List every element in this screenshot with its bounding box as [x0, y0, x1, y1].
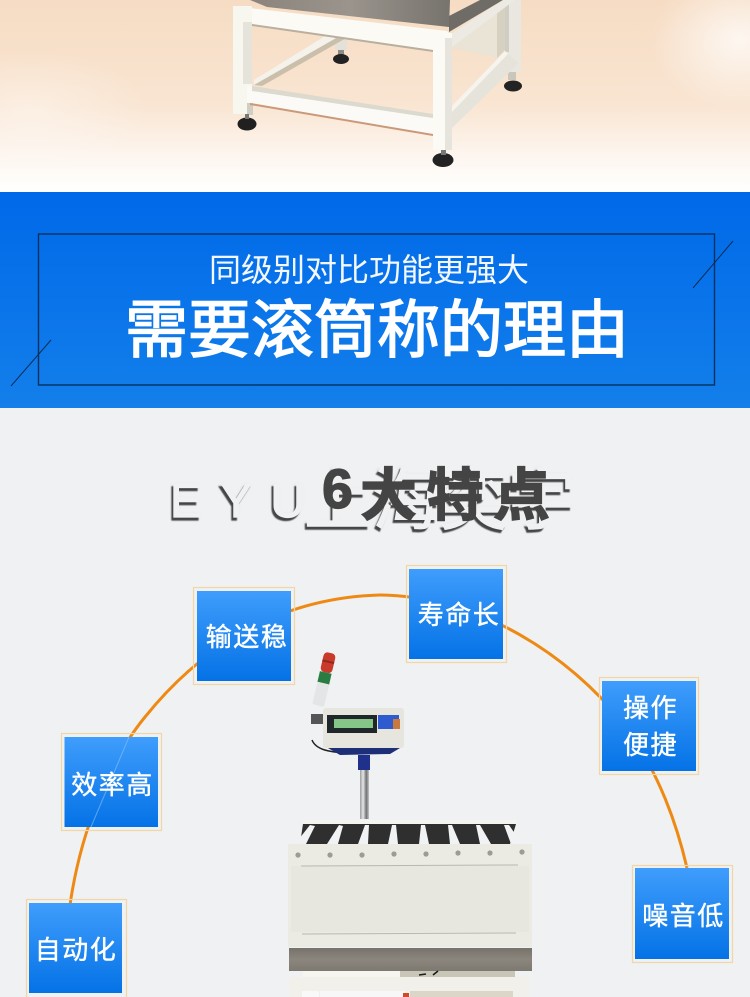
tile: 噪音低: 噪音低: [642, 901, 725, 931]
tile: 寿命长: [406, 566, 506, 662]
watermark: EYU brand: EYU: [169, 476, 304, 529]
heading: six features: 大特点: [360, 464, 550, 528]
icon: pole: [358, 755, 370, 819]
icon: tower light: [312, 652, 336, 707]
tile: 输送稳: [194, 588, 294, 684]
panel: product photo top: [0, 0, 750, 192]
tile: 操作便捷: 操作: [623, 693, 678, 723]
chart line: orange feature arc: [70, 595, 687, 905]
panel: machine base frame: [289, 971, 529, 997]
icon: steel weighing table and white stand: [233, 0, 522, 167]
tile: 自动化: [26, 900, 126, 997]
watermark: EYU brand: [168, 463, 576, 542]
tile: 自动化: 自动化: [35, 935, 117, 965]
panel: blue heading band: [0, 192, 750, 408]
icon: weighing indicator: [323, 708, 404, 755]
panel: features background: [0, 408, 750, 997]
tile: 输送稳: 输送稳: [206, 622, 288, 652]
watermark: EYU brand: 上海奕宇: [302, 466, 574, 542]
tile: 寿命长: 寿命长: [418, 600, 500, 630]
heading: six features: 6: [322, 457, 353, 520]
watermark: EYU brand: EYU: [170, 475, 305, 528]
watermark: EYU brand: 上海奕宇: [304, 463, 576, 539]
tile: 噪音低: [632, 866, 732, 962]
tile: 效率高: [62, 734, 162, 830]
heading: subtitle: 同级别对比功能更强大: [209, 252, 529, 288]
watermark: EYU brand: EYU: [168, 478, 303, 531]
icon: rollers: [295, 820, 522, 844]
watermark: EYU brand: 上海奕宇: [302, 464, 574, 540]
tile: 操作便捷: 便捷: [623, 730, 678, 760]
tile: 操作便捷: [600, 678, 698, 774]
tile: 效率高: 效率高: [71, 770, 154, 800]
panel: machine housing: [288, 844, 532, 971]
heading: main title: 需要滚筒称的理由: [125, 296, 629, 366]
product: roller scale with indicator: [288, 652, 532, 997]
